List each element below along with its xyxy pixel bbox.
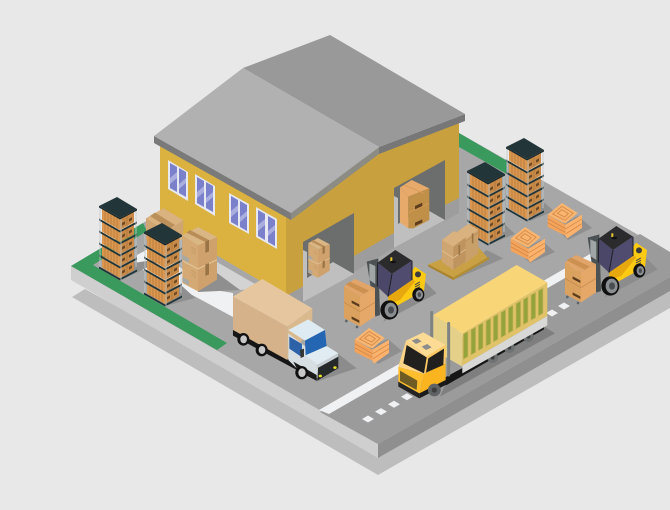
door 2 [394, 160, 445, 248]
crate middle [511, 227, 555, 263]
container slots [463, 288, 543, 359]
shadow: rack 3 and 4 [490, 199, 554, 244]
window 2 [195, 174, 215, 216]
carton behind left stack [146, 208, 183, 240]
wheels [237, 333, 308, 379]
wall base [286, 286, 304, 305]
cartons: left stack [182, 227, 217, 291]
cab [288, 319, 338, 381]
cargo box [233, 279, 312, 360]
roof [154, 35, 465, 220]
truck shadow [293, 354, 357, 382]
container [433, 265, 547, 373]
right wall [286, 122, 459, 296]
rack 2 [144, 223, 182, 306]
cartons: door 1 stack [308, 238, 330, 278]
forklift 2 load [565, 255, 596, 304]
window 3 [229, 193, 249, 234]
rear wheels [487, 331, 534, 363]
window 4 [256, 207, 277, 249]
crate stack: door 2 [400, 180, 429, 228]
building [154, 35, 465, 305]
platform: ground base and road [71, 133, 670, 475]
crate front [355, 328, 402, 364]
crate right [548, 203, 592, 240]
door 1 [303, 213, 354, 302]
exhaust pipes [432, 312, 449, 375]
shadow: rack 2 [147, 286, 195, 306]
forklift 1 load [344, 279, 375, 328]
pallet with cartons [428, 224, 503, 280]
tan truck [233, 279, 357, 382]
left wall [160, 145, 286, 296]
forklift 1 [367, 250, 437, 322]
chassis [440, 324, 544, 385]
forklift 2 [588, 226, 658, 298]
yellow truck [398, 265, 555, 398]
loading area in front of left wall [137, 248, 262, 317]
rack 1 [99, 197, 137, 280]
chassis [233, 329, 317, 381]
rack 3 [467, 162, 505, 246]
truck shadow [440, 326, 555, 397]
rack 4 [506, 138, 544, 222]
shadow: rack 1 [102, 258, 167, 280]
window 1 [168, 160, 188, 201]
cab [398, 332, 446, 398]
